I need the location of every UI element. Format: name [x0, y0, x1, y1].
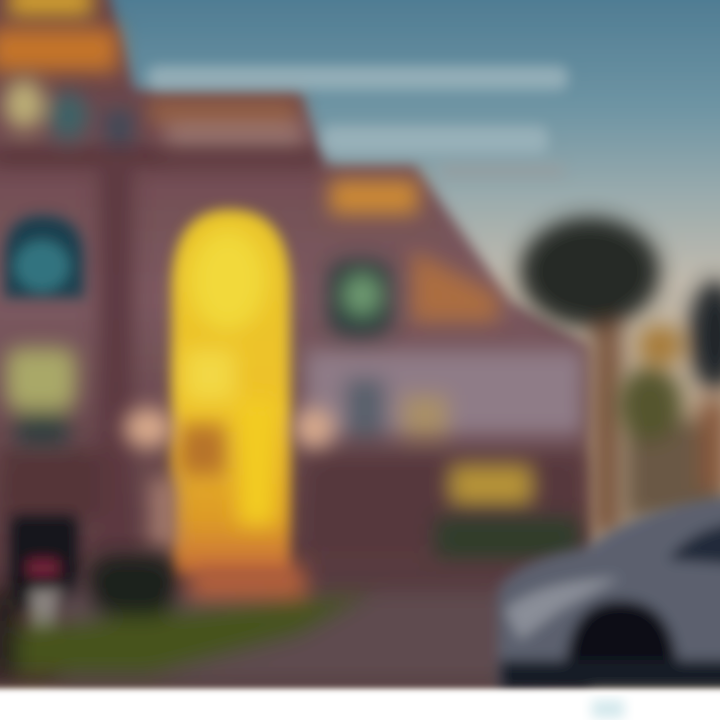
blue arched window — [4, 215, 84, 298]
palm tree — [520, 217, 660, 535]
tower windows — [0, 79, 320, 164]
silver car — [498, 495, 720, 690]
white bottom strip — [0, 689, 720, 720]
arch highlights — [180, 230, 276, 525]
bottom accent — [592, 700, 624, 718]
glowing yellow arch — [172, 210, 290, 575]
ground and driveway — [0, 518, 580, 685]
dark doorway — [10, 515, 78, 640]
green window — [328, 260, 392, 336]
blurred headline text — [148, 66, 568, 178]
yellow-green window — [6, 348, 76, 446]
right side trees — [618, 280, 720, 520]
lamp glows — [124, 408, 334, 548]
building — [0, 0, 590, 690]
lower facade panels — [0, 160, 585, 570]
tower top and roof bands — [0, 0, 498, 322]
